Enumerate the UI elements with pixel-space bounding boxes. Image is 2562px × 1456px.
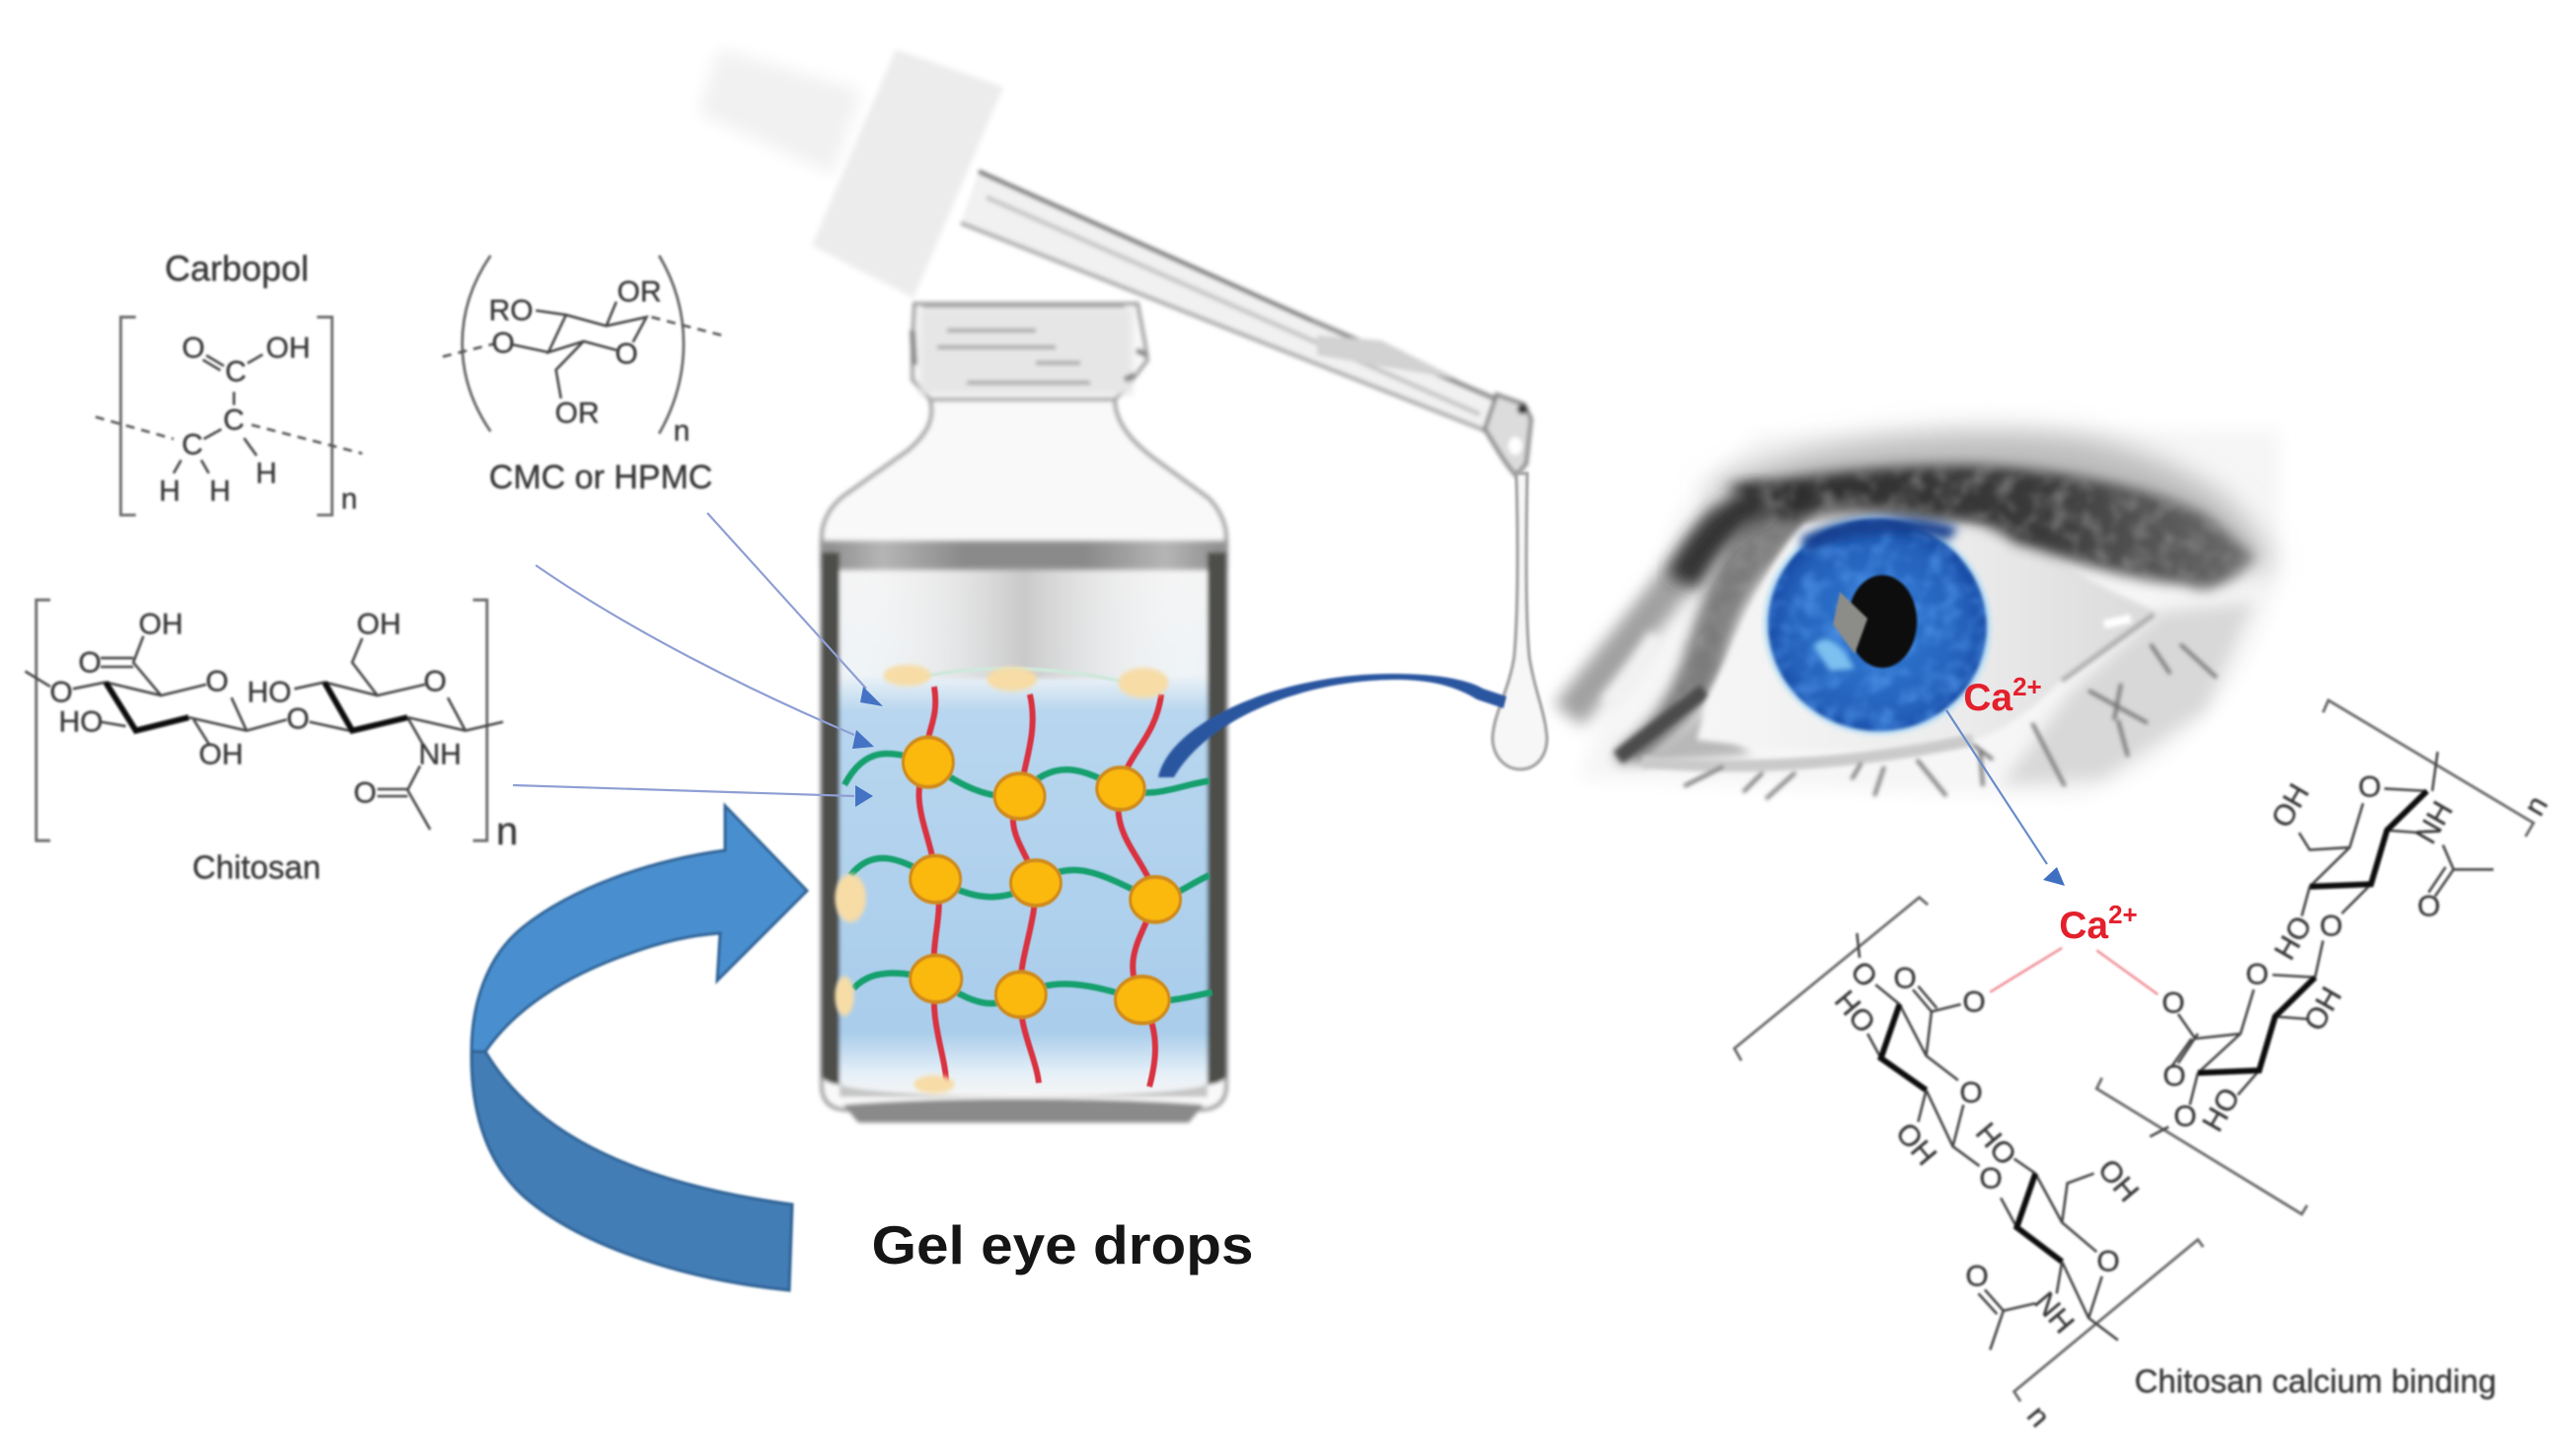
chemical structure: Chitosan: O	[78, 647, 102, 679]
label: CMC or HPMC: CMC or HPMC	[489, 459, 712, 496]
dropper and bottle illustration	[698, 49, 1547, 1123]
chemical structure: Carbopol: C	[182, 428, 203, 462]
chemical structure: Carbopol: C	[225, 355, 247, 389]
atoms: right chain: OH	[2298, 982, 2349, 1037]
chemical structure: Chitosan: OH	[199, 738, 243, 771]
chemical structure: Chitosan: OH	[357, 608, 401, 641]
atoms: left chain: NH	[2027, 1286, 2081, 1340]
chemical structure: Carbopol: O	[182, 331, 205, 365]
atoms: right chain: HO	[2196, 1082, 2247, 1137]
big curved blue arrow	[472, 806, 807, 1290]
atoms: left chain: n	[2020, 1400, 2056, 1433]
upper lid	[1726, 466, 2254, 589]
atoms: left chain	[1828, 955, 2145, 1433]
atoms: left chain: HO	[1969, 1117, 2022, 1172]
label: Chitosan: Chitosan	[192, 848, 321, 886]
chemical structure: Chitosan: n	[496, 810, 518, 853]
chemical structure: Chitosan: O	[286, 702, 310, 736]
atoms: right chain: n	[2519, 791, 2554, 821]
arrow: CMC or HPMC	[707, 513, 883, 706]
chemical structure: Carbopol	[96, 249, 362, 515]
arrow: gel to drop	[1158, 674, 1506, 777]
chemical structure: Chitosan: HO	[59, 706, 103, 738]
chemical structure: CMC or HPMC: RO	[489, 294, 533, 328]
atoms: right chain: NH	[2410, 796, 2459, 849]
atoms: right chain: HO	[2268, 910, 2319, 966]
chemical structure: CMC or HPMC: OR	[554, 397, 600, 430]
bottle	[822, 304, 1226, 1123]
atoms: left chain: O	[2096, 1245, 2120, 1278]
chemical structure: CMC or HPMC: O	[491, 328, 515, 359]
arrow: eye to calcium binding	[1946, 710, 2065, 886]
dropper	[698, 49, 1547, 769]
atoms: right chain: O	[2162, 1059, 2186, 1093]
chemical structure: Carbopol: H	[256, 458, 277, 489]
atoms: right chain: O	[2319, 910, 2343, 943]
drop	[1493, 473, 1547, 769]
atoms: left chain: O	[1959, 1077, 1983, 1109]
pupil	[1848, 575, 1917, 668]
atoms: left chain: O	[1979, 1162, 2003, 1196]
lower lid lashes	[1643, 615, 2217, 799]
atoms: right chain: OH	[2265, 778, 2316, 834]
chemical structure: Chitosan: O	[353, 777, 377, 809]
chemical structure: Chitosan: HO	[247, 677, 292, 708]
atoms: left chain: OH	[2091, 1153, 2145, 1208]
ion label on eye: Ca2+: 2+	[2013, 672, 2042, 701]
chemical structure: Chitosan	[26, 600, 518, 886]
title: Gel eye drops: Gel eye drops	[872, 1214, 1253, 1275]
chemical structure: Carbopol: H	[159, 475, 181, 507]
chemical structure: Chitosan: O	[205, 665, 229, 698]
iris	[1742, 494, 2013, 757]
atoms: left chain: O	[1844, 955, 1883, 994]
atoms: left chain: HO	[1828, 984, 1881, 1040]
arrow: polymer lines into gel	[513, 513, 883, 807]
chemical structure: Chitosan: NH	[418, 738, 462, 771]
chemical structure: Carbopol: H	[209, 475, 231, 507]
atoms: left chain: OH	[1889, 1117, 1942, 1172]
chemical structure: CMC or HPMC: OR	[618, 276, 661, 308]
chemical structure: Chitosan: O	[49, 677, 73, 708]
ion label on eye: Ca2+: Ca	[1963, 677, 2013, 719]
atoms: left chain: O	[1965, 1261, 1989, 1292]
chemical structure: Carbopol: C	[223, 404, 245, 436]
ion label: Ca2+: 2+	[2108, 900, 2138, 929]
chemical structure: Chitosan: OH	[138, 608, 183, 641]
heading: Carbopol: Carbopol	[165, 249, 309, 288]
caption: Chitosan calcium binding: Chitosan calcium binding	[2135, 1363, 2496, 1399]
atoms: right chain: O	[2358, 771, 2381, 803]
arrow: Chitosan	[513, 785, 873, 807]
ion label: Ca2+: Ca	[2059, 905, 2108, 947]
atoms: right chain: O	[2245, 959, 2269, 990]
calcium bonds	[1990, 948, 2158, 994]
atoms: left chain: O	[1893, 963, 1917, 994]
atoms: right chain: O	[2173, 1101, 2197, 1132]
atoms: right chain	[2161, 771, 2554, 1137]
hydrogel network	[835, 665, 1212, 1093]
atoms: right chain: O	[2417, 890, 2441, 923]
chemical structure: Carbopol: n	[341, 483, 357, 515]
atoms: right chain: O	[2161, 986, 2185, 1020]
chemical structure: CMC or HPMC	[443, 255, 724, 496]
arrow: Carbopol	[536, 565, 874, 749]
eye illustration	[1569, 429, 2279, 799]
chemical structure: CMC or HPMC: n	[674, 414, 690, 448]
chemical structure: CMC or HPMC: O	[615, 337, 638, 371]
skin and lid shadow	[1569, 429, 2279, 799]
atoms: left chain: O	[1962, 986, 1986, 1018]
chemical structure: Chitosan: O	[423, 665, 447, 698]
sclera	[1697, 523, 2160, 750]
chitosan calcium binding structure	[1734, 700, 2554, 1433]
chemical structure: Carbopol: OH	[266, 331, 310, 365]
